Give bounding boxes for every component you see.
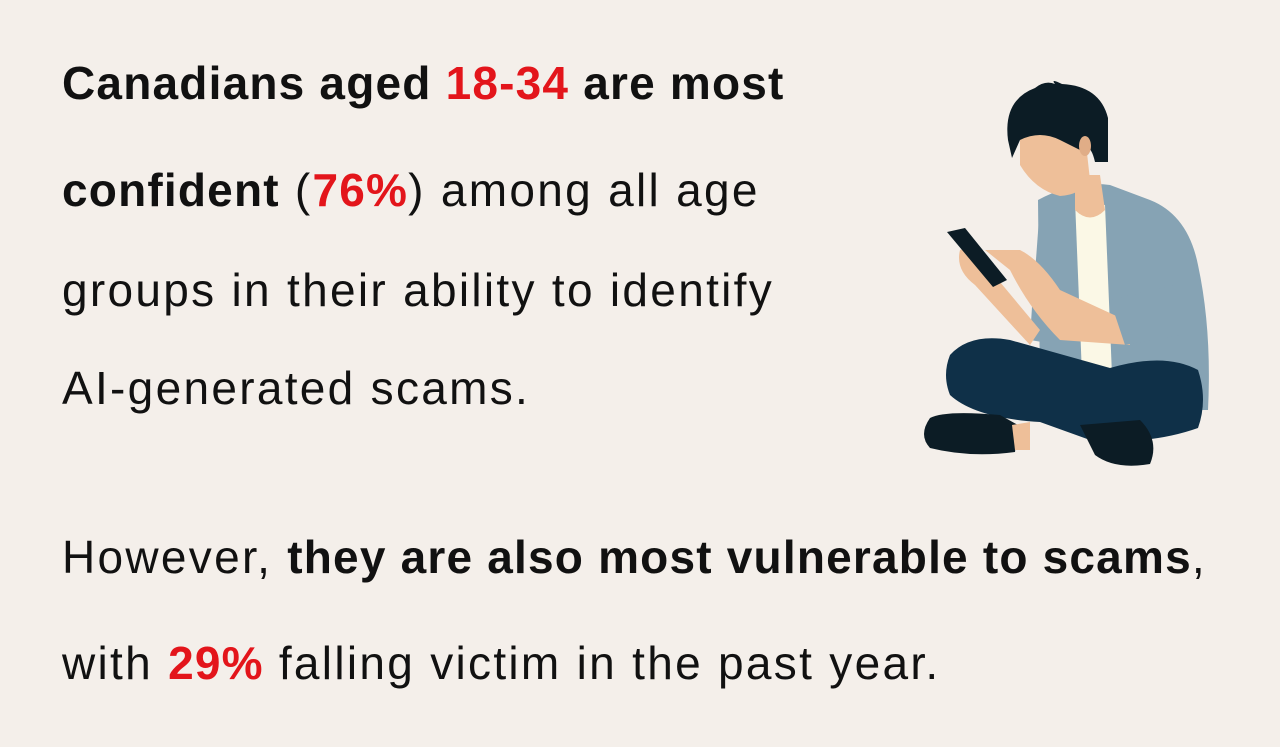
line 6: with 29% falling victim in the past year. bbox=[62, 637, 940, 689]
line 5: However, they are also most vulnerable to scams, bbox=[62, 531, 1207, 583]
ear bbox=[1079, 136, 1091, 156]
line 4: AI-generated scams. bbox=[62, 362, 530, 414]
phone bbox=[947, 228, 1007, 287]
forearm holding phone bbox=[959, 249, 1040, 345]
line 3: groups in their ability to identify bbox=[62, 264, 774, 316]
shoe right bbox=[1080, 420, 1153, 466]
ankle bbox=[1012, 422, 1030, 450]
text block: vulnerability statement bbox=[62, 531, 1207, 689]
shoe left bbox=[924, 413, 1018, 454]
line 1: Canadians aged 18-34 are most bbox=[62, 57, 785, 109]
arm left (sleeve) bbox=[1030, 290, 1060, 345]
legs bbox=[946, 338, 1203, 441]
right sleeve bbox=[1110, 285, 1180, 345]
right forearm bbox=[985, 250, 1130, 345]
jacket front left bbox=[1033, 200, 1082, 375]
line 2: confident (76%) among all age bbox=[62, 164, 760, 216]
t-shirt bbox=[1072, 205, 1112, 378]
hair bbox=[1007, 81, 1108, 162]
face bbox=[1020, 126, 1090, 196]
jacket back bbox=[1038, 184, 1209, 410]
text block: confidence statement bbox=[62, 57, 785, 414]
neck bbox=[1075, 175, 1105, 218]
